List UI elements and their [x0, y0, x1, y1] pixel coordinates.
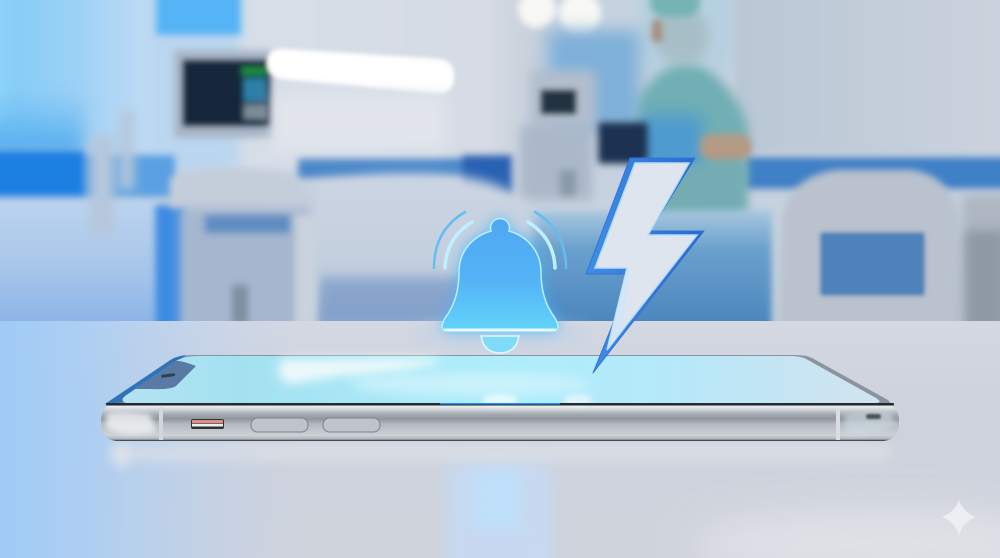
- phone top rim: [105, 355, 890, 405]
- blue light on edge: [440, 403, 560, 404]
- phone side frame: [101, 403, 899, 441]
- smartphone lying flat: [101, 355, 899, 441]
- pale wall glow under light: [275, 95, 445, 150]
- bell clapper: [481, 336, 519, 353]
- bright window panel at top left: [0, 0, 240, 170]
- bell reflection on screen: [482, 394, 518, 406]
- blue back wall behind nurse: [548, 0, 735, 130]
- lower left wall panel: [0, 198, 158, 338]
- speaker slot: [191, 419, 224, 429]
- bell base highlight: [444, 328, 556, 331]
- phone reflection columns: [445, 462, 553, 558]
- central wall: [230, 0, 550, 170]
- icon: glowing bell: [434, 212, 566, 353]
- bedside cart: [170, 168, 317, 340]
- right wall: [735, 0, 1000, 152]
- wall monitor: [174, 50, 272, 138]
- blue wall stripes: [0, 151, 1000, 197]
- blurred nurse in teal scrubs: [598, 0, 752, 215]
- chrome edge line: [106, 403, 894, 406]
- equipment pole: [90, 110, 134, 235]
- side button 2: [323, 418, 380, 432]
- bolt reflection on screen: [564, 394, 592, 406]
- blue bed sheet: [505, 210, 772, 340]
- sound waves: [434, 212, 566, 268]
- hospital bed: [310, 174, 535, 340]
- blue ceiling tile: [156, 0, 241, 35]
- side button 1: [251, 418, 308, 432]
- phone reflection on table: [110, 444, 890, 462]
- screen glare: [278, 358, 445, 384]
- screen center glow: [350, 372, 590, 396]
- blurred hospital room background: [0, 0, 1000, 340]
- sparkle watermark: [942, 500, 976, 535]
- round ceiling lights: [518, 0, 601, 35]
- white table surface: [0, 321, 1000, 558]
- icon: lightning bolt: [586, 158, 704, 373]
- left blue rim: [105, 355, 186, 404]
- bed rail at right: [778, 170, 1000, 340]
- bolt lower light edge: [607, 268, 630, 350]
- second monitor and stand: [520, 70, 596, 200]
- phone screen: [122, 356, 880, 403]
- ceiling light bar: [267, 49, 454, 93]
- blue column: [155, 205, 185, 330]
- notch: [134, 361, 196, 389]
